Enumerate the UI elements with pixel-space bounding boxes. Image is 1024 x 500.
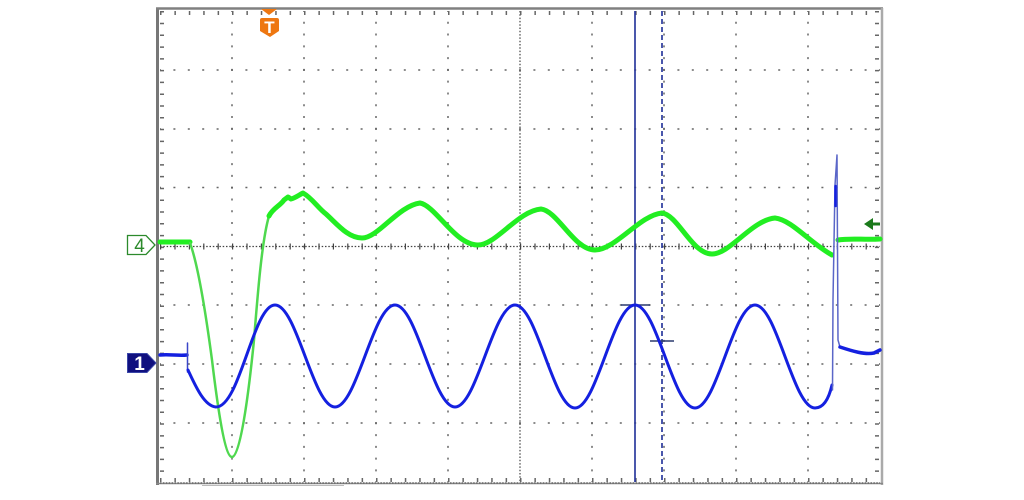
measurement grid	[160, 11, 880, 483]
channel 1 label: 1	[134, 354, 145, 375]
channel 4 trace (green)	[160, 193, 880, 457]
channel 1 label	[128, 354, 156, 375]
cursor mark: peak	[621, 304, 650, 306]
cursor: dashed vertical	[661, 11, 663, 482]
center axes	[160, 11, 880, 482]
channel 4 label: 4	[134, 236, 145, 257]
channel 1 trace (blue)	[160, 155, 880, 408]
channel 4 label	[128, 236, 155, 257]
cursor mark: lower	[650, 340, 674, 342]
cursors	[621, 11, 674, 482]
screen frame	[156, 8, 883, 486]
trigger marker T	[260, 9, 279, 37]
cursor: solid vertical	[634, 11, 636, 482]
trigger marker T: T	[264, 18, 275, 37]
edge ticks	[160, 11, 880, 483]
ground reference arrow	[864, 218, 880, 230]
